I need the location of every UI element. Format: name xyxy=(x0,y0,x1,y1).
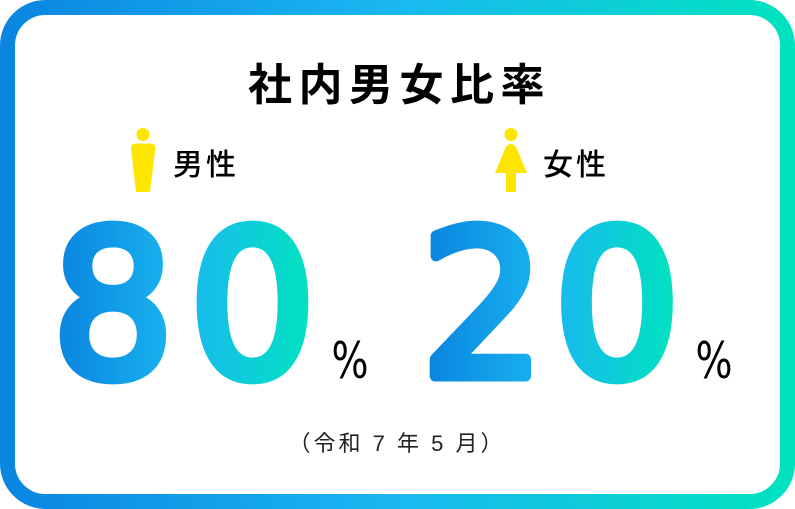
digits 80 xyxy=(52,189,316,424)
percent sign: % xyxy=(695,331,733,390)
title: 社内男女比率 xyxy=(248,61,551,110)
label: male: 男性 xyxy=(173,149,239,182)
percent sign: % xyxy=(331,331,369,390)
digits 20: 0 xyxy=(553,189,681,424)
figure: 80 percent xyxy=(52,189,369,424)
label: female: 女性 xyxy=(543,149,609,182)
date note: （令和 7 年 5 月） xyxy=(289,431,505,456)
icon: man xyxy=(131,128,155,192)
digits 20 xyxy=(421,188,681,424)
icon: woman xyxy=(495,128,527,192)
figure: 20 percent xyxy=(421,188,733,424)
digits 80: 8 xyxy=(52,189,174,424)
digits 20: 2 xyxy=(421,188,545,424)
digits 80: 0 xyxy=(189,189,316,424)
